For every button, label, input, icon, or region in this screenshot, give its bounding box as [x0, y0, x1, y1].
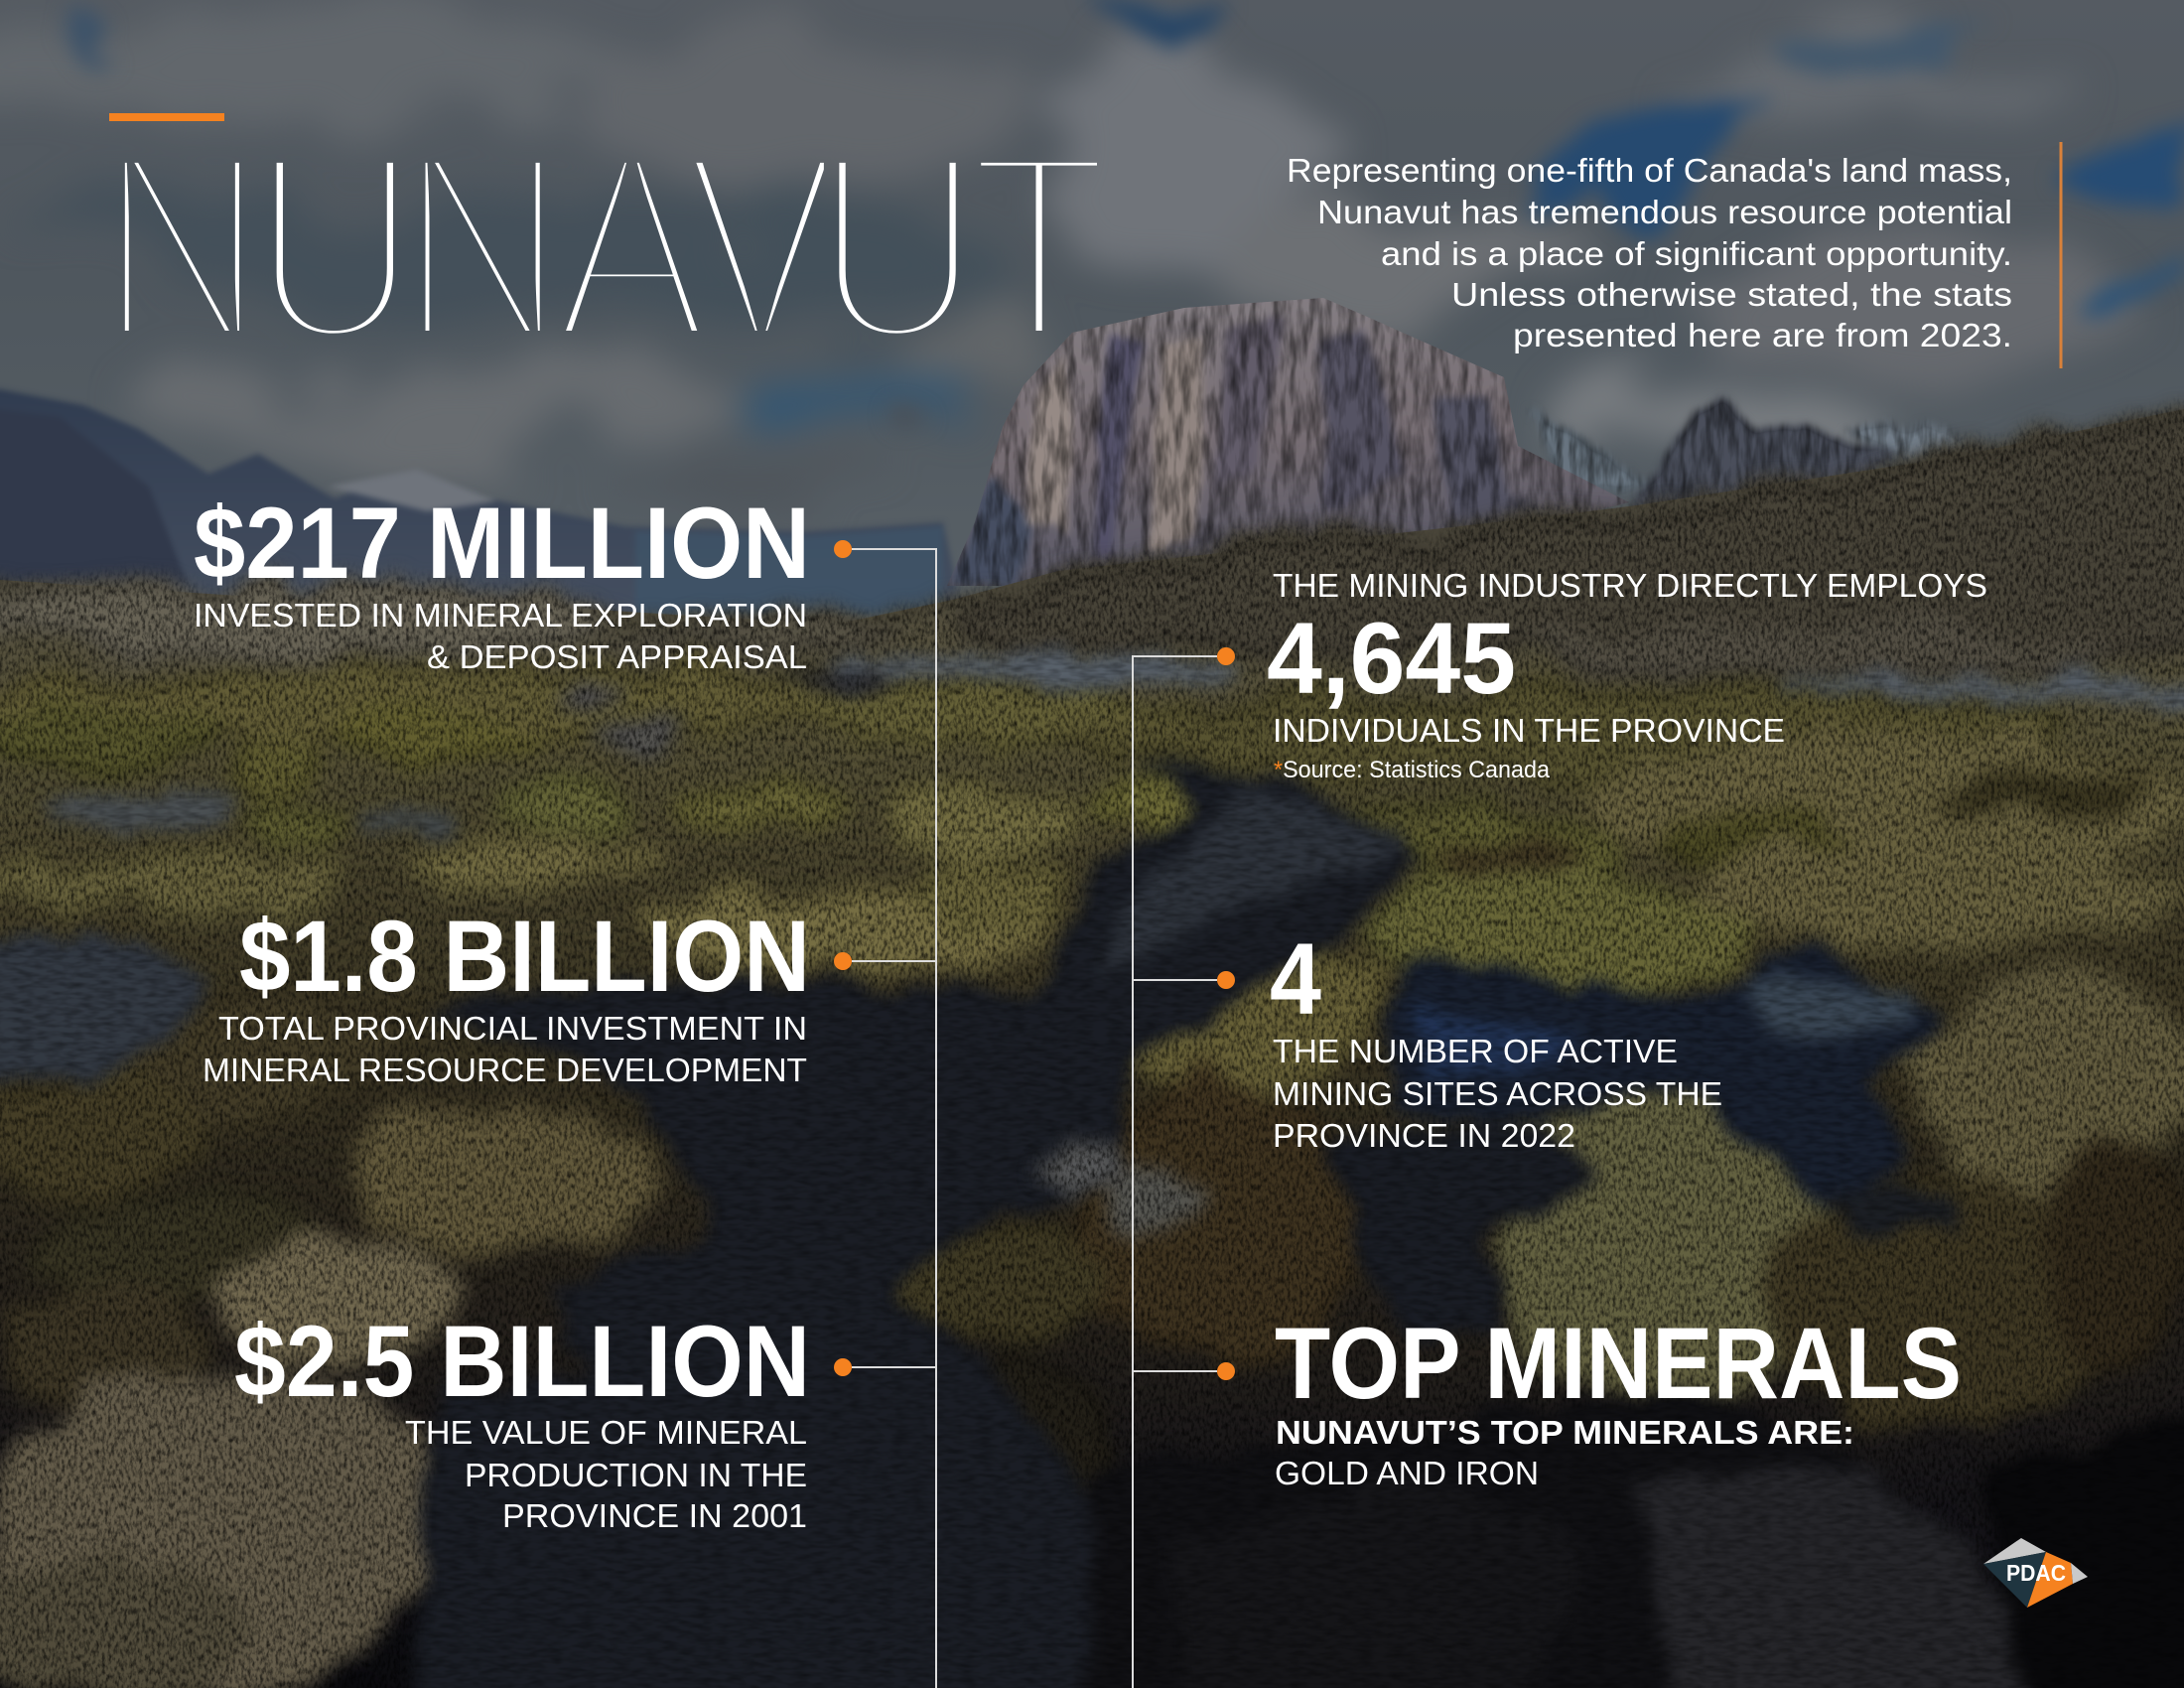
- stat: $1.8 billion: $1.8 BILLION: [239, 900, 810, 1013]
- background: tundra ground: [0, 409, 2184, 1688]
- background: rocks: [548, 670, 1117, 1208]
- stat: top minerals: GOLD AND IRON: [1275, 1456, 1539, 1492]
- marker dot: top minerals: [1217, 1362, 1235, 1380]
- background: far mountains: [1532, 395, 1978, 506]
- sky clouds: [0, 20, 2105, 514]
- background: grass clumps and hills: [0, 397, 2184, 1688]
- stat: 4,645 employed: *Source: Statistics Canada: [1274, 757, 1551, 783]
- stat: $1.8 billion: MINERAL RESOURCE DEVELOPMENT: [203, 1053, 807, 1089]
- marker dot: $1.8 billion: [834, 952, 852, 970]
- stat: $217 million: [194, 487, 810, 676]
- intro text block: and is a place of significant opportunity.: [1381, 235, 2012, 272]
- intro text block: Unless otherwise stated, the stats: [1451, 276, 2012, 313]
- left connector trunk: [852, 549, 936, 1688]
- stat: $1.8 billion: [203, 900, 810, 1089]
- background: ground texture base: [0, 392, 2184, 1688]
- stat: top minerals: TOP MINERALS: [1275, 1307, 1962, 1420]
- stat: $217 million: INVESTED IN MINERAL EXPLORATION: [194, 598, 807, 634]
- stat: 4,645 employed: INDIVIDUALS IN THE PROVINCE: [1273, 713, 1785, 750]
- marker dot: $2.5 billion: [834, 1358, 852, 1376]
- right connector trunk: [1133, 656, 1217, 1688]
- stat: $2.5 billion: PROVINCE IN 2001: [502, 1498, 807, 1535]
- intro text block: [1287, 152, 2012, 353]
- stat: 4 active mining sites: PROVINCE IN 2022: [1273, 1118, 1575, 1155]
- background: main rock peak: [943, 288, 1638, 596]
- stat: $217 million: & DEPOSIT APPRAISAL: [427, 639, 807, 676]
- intro text block: Representing one-fifth of Canada's land mass,: [1287, 152, 2012, 189]
- stat: $2.5 billion: [234, 1305, 810, 1535]
- stat: $1.8 billion: TOTAL PROVINCIAL INVESTMENT IN: [218, 1011, 807, 1048]
- stat: 4,645 employed: [1267, 568, 1987, 783]
- stat: $2.5 billion: $2.5 BILLION: [234, 1305, 810, 1418]
- stat: 4 active mining sites: 4: [1270, 922, 1321, 1036]
- stat: top minerals: NUNAVUT’S TOP MINERALS ARE:: [1276, 1414, 1854, 1451]
- intro text block: Nunavut has tremendous resource potential: [1317, 194, 2012, 230]
- stat: $2.5 billion: THE VALUE OF MINERAL: [405, 1415, 807, 1452]
- intro accent rule: [2059, 142, 2063, 368]
- background: streams and pools: [0, 655, 2184, 1688]
- stat: 4 active mining sites: THE NUMBER OF ACTIVE: [1273, 1034, 1678, 1070]
- stat: 4 active mining sites: MINING SITES ACROSS THE: [1273, 1076, 1722, 1113]
- intro text block: presented here are from 2023.: [1513, 317, 2012, 353]
- stat: top minerals: [1275, 1307, 1962, 1492]
- marker dot: 4 active mining sites: [1217, 971, 1235, 989]
- icon: PDAC logo: PDAC: [2006, 1560, 2066, 1586]
- title: NUNAVUT: NUNAVUT: [98, 94, 1110, 397]
- stat: 4,645 employed: 4,645: [1267, 602, 1516, 715]
- title accent bar: [109, 113, 224, 121]
- marker dot: $217 million: [834, 540, 852, 558]
- stat: 4 active mining sites: [1270, 922, 1722, 1155]
- stat: $2.5 billion: PRODUCTION IN THE: [465, 1458, 807, 1494]
- sky: blue gaps: [60, 0, 2184, 442]
- stat: $217 million: $217 MILLION: [194, 487, 810, 600]
- icon: PDAC logo: [1983, 1538, 2088, 1608]
- stat: 4,645 employed: THE MINING INDUSTRY DIRECTLY EMPLOYS: [1273, 568, 1987, 605]
- marker dot: 4,645 employed: [1217, 647, 1235, 665]
